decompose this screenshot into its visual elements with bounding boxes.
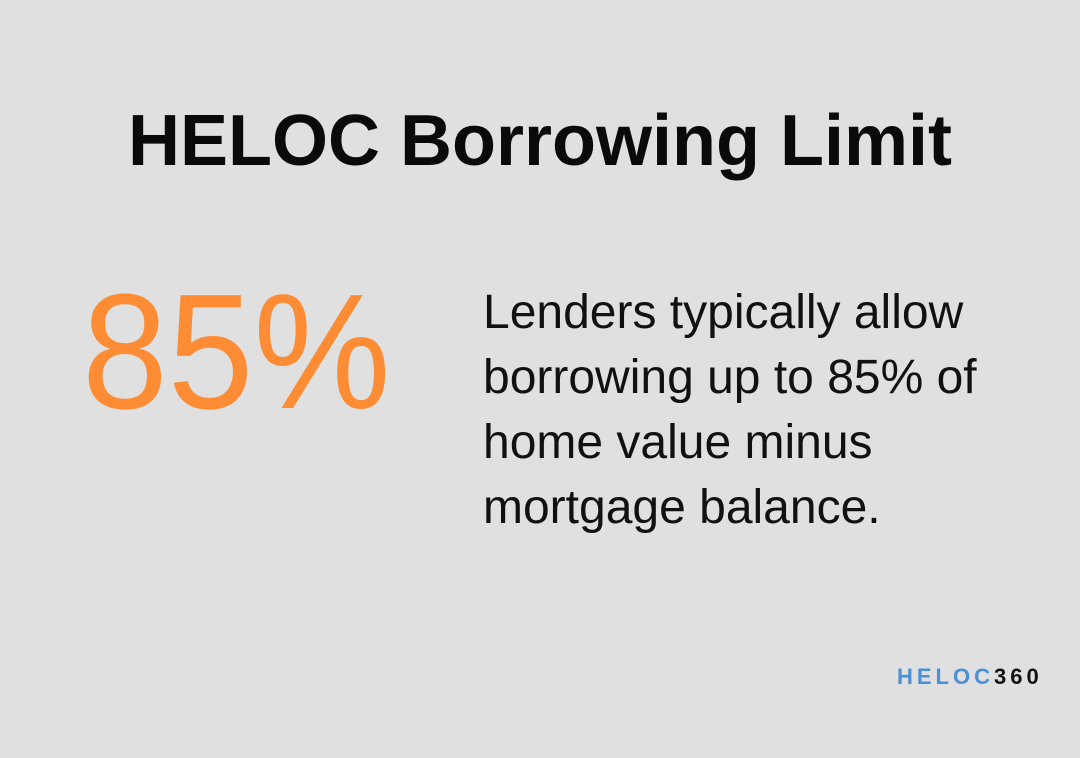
- stat: 85%: 85%: [82, 260, 391, 443]
- logo: HELOC360: HELOC360: [897, 664, 1043, 689]
- title: HELOC Borrowing Limit: [128, 101, 952, 181]
- description text: Lenders typically allow borrowing up to 85% of home value minus mortgage balance.: [483, 286, 977, 534]
